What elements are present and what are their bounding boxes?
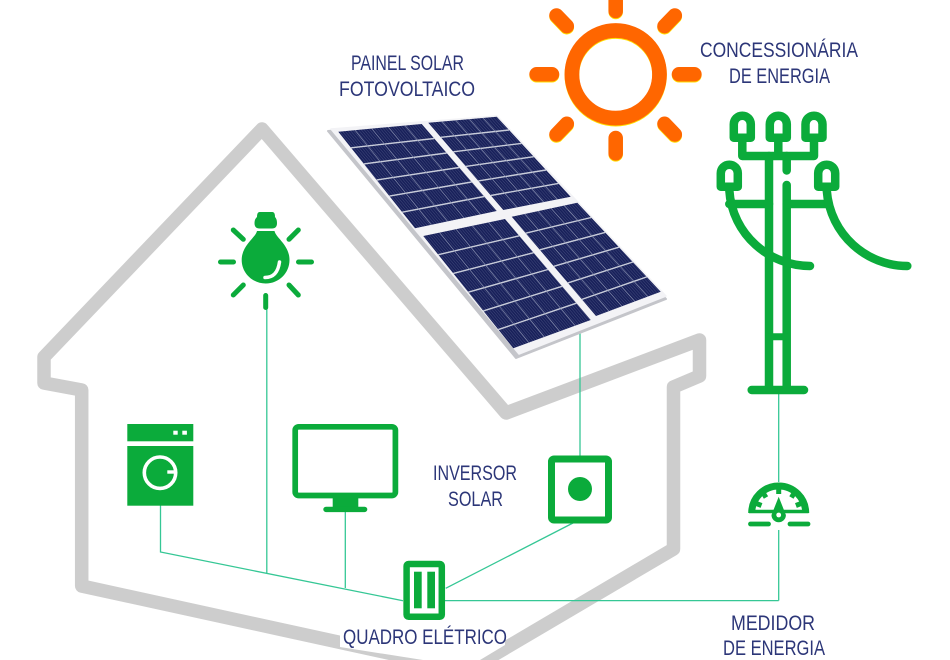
label: concessionária de energia: [700, 39, 858, 88]
label: medidor de energia: DE ENERGIA: [723, 637, 825, 660]
icon: light bulb: [220, 212, 312, 308]
icon: utility pole: [721, 116, 907, 390]
module: top right: [428, 117, 571, 210]
module: bottom right: [512, 203, 661, 316]
label: inversor solar: INVERSOR: [433, 462, 517, 485]
icon: television: [295, 427, 395, 512]
label: painel solar fotovoltaico: PAINEL SOLAR: [351, 52, 464, 75]
icon: energy meter: [749, 486, 808, 524]
label: painel solar fotovoltaico: [339, 52, 475, 101]
icon: solar inverter: [552, 459, 608, 520]
label: concessionária de energia: DE ENERGIA: [729, 65, 830, 88]
label: painel solar fotovoltaico: FOTOVOLTAICO: [339, 78, 475, 101]
label: medidor de energia: MEDIDOR: [731, 612, 815, 635]
connection wires: [160, 308, 779, 601]
label: concessionária de energia: CONCESSIONÁRIA: [700, 39, 858, 62]
label: medidor de energia: [723, 612, 825, 660]
module: top left: [338, 124, 497, 228]
label: inversor solar: SOLAR: [448, 488, 503, 511]
icon: washing machine: [127, 424, 193, 506]
house outline: [44, 129, 700, 660]
icon: sun: [537, 0, 694, 154]
label: inversor solar: [433, 462, 517, 511]
icon: electrical panel: [407, 564, 442, 617]
label: quadro elétrico: QUADRO ELÉTRICO: [343, 626, 507, 649]
label backing: quadro elétrico: [340, 625, 505, 660]
solar panel: [328, 116, 666, 358]
module: bottom left: [423, 219, 591, 348]
